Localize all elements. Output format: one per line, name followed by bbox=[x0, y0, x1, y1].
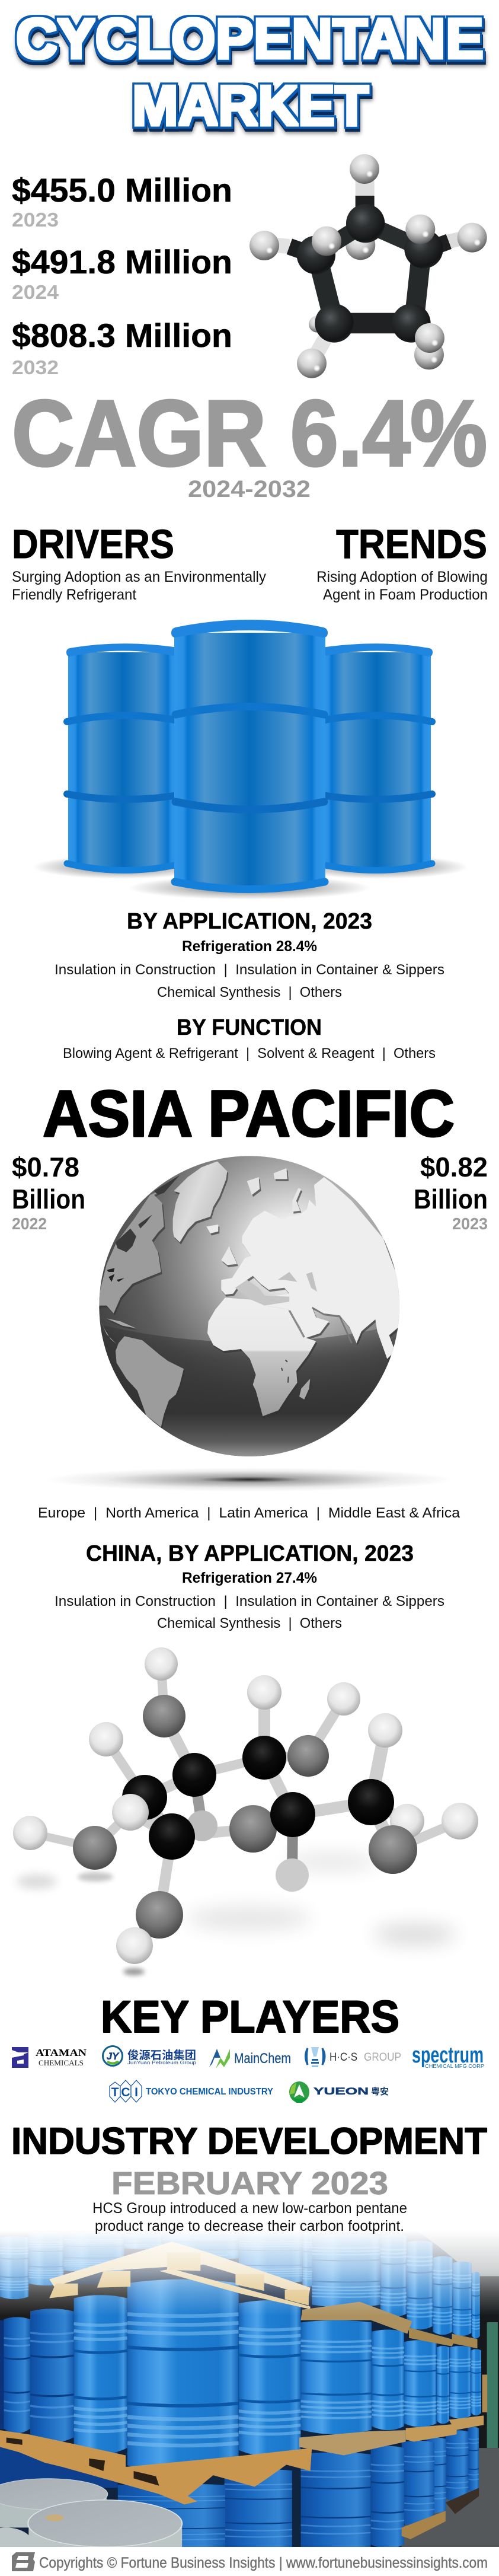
stat: 2022 value: Billion bbox=[12, 1184, 85, 1214]
heading: by application: BY APPLICATION, 2023 bbox=[127, 909, 372, 934]
white top fade bbox=[0, 2224, 499, 2316]
segment list: Insulation in Construction | Insulation in Container & Sippers bbox=[55, 1593, 444, 1609]
drivers text: Surging Adoption as an Environmentally bbox=[12, 569, 266, 585]
development date: FEBRUARY 2023 bbox=[111, 2166, 388, 2201]
logo: Yueon bbox=[289, 2081, 389, 2103]
logo: JunYuan Petroleum: 俊源石油集团 bbox=[127, 2046, 196, 2062]
top segment: Refrigeration 27.4% bbox=[182, 1570, 317, 1586]
logo: HCS Group: H·C·S bbox=[330, 2051, 357, 2064]
drivers text: Friendly Refrigerant bbox=[12, 586, 136, 603]
grey drums bbox=[0, 2478, 183, 2547]
segment list bbox=[55, 1593, 444, 1631]
heading: by function: BY FUNCTION bbox=[177, 1015, 322, 1040]
upper drums bbox=[0, 2232, 480, 2339]
panel: by function bbox=[63, 1015, 436, 1061]
development text: product range to decrease their carbon footprint. bbox=[95, 2218, 404, 2234]
south america bbox=[116, 1336, 184, 1427]
stat: 2023 value: $0.82 bbox=[420, 1152, 488, 1182]
title: CYCLOPENTANE bbox=[16, 7, 484, 71]
left barrel bbox=[66, 643, 178, 871]
function list: Blowing Agent & Refrigerant | Solvent & Reagent | Others bbox=[63, 1045, 436, 1061]
heading: Asia Pacific: ASIA PACIFIC bbox=[43, 1077, 455, 1150]
stat: 2022 value: $0.78 bbox=[12, 1152, 79, 1182]
eurasia bbox=[221, 1177, 403, 1359]
logo: HCS Group: GROUP bbox=[364, 2051, 401, 2064]
north america bbox=[95, 1189, 164, 1318]
panel: trends bbox=[316, 521, 488, 603]
top segment: Refrigeration 28.4% bbox=[182, 938, 317, 955]
title: MARKET bbox=[132, 74, 369, 138]
segment list: Chemical Synthesis | Others bbox=[157, 984, 342, 1000]
logo: Ataman Chemicals: ATAMAN bbox=[36, 2047, 87, 2058]
heading: key players: KEY PLAYERS bbox=[101, 1992, 399, 2042]
inland seas bbox=[235, 1280, 289, 1306]
heading: China: CHINA, BY APPLICATION, 2023 bbox=[86, 1541, 414, 1566]
panel: China by application bbox=[55, 1541, 444, 1631]
logo: Yueon: 粤安 bbox=[371, 2085, 389, 2097]
logo: HCS Group bbox=[306, 2047, 401, 2067]
warehouse backdrop bbox=[0, 2224, 499, 2550]
icon: cyclopentane molecule bbox=[250, 154, 487, 378]
panel: by application bbox=[55, 909, 444, 1000]
logo: Tokyo Chemical Industry: C bbox=[121, 2086, 130, 2099]
segment list bbox=[55, 962, 444, 1000]
segment list: Chemical Synthesis | Others bbox=[157, 1615, 342, 1631]
logo: Ataman Chemicals bbox=[12, 2047, 87, 2068]
middle drums bbox=[0, 2279, 481, 2473]
development text bbox=[92, 2200, 407, 2234]
logo: JunYuan Petroleum: JY bbox=[107, 2051, 120, 2062]
logo: Yueon: YUEON bbox=[314, 2086, 369, 2097]
trends text bbox=[316, 569, 488, 603]
icon: oil barrels bbox=[33, 620, 468, 900]
value 2024: $491.8 Million bbox=[12, 243, 232, 280]
logo: Tokyo Chemical Industry: T bbox=[111, 2086, 119, 2099]
title bbox=[16, 7, 484, 138]
heading: industry development: INDUSTRY DEVELOPMENT bbox=[11, 2121, 487, 2162]
hudson bay and lakes bbox=[116, 1175, 180, 1252]
africa bbox=[207, 1297, 316, 1416]
logo: Tokyo Chemical Industry: I bbox=[135, 2086, 138, 2099]
icon: Fortune Business Insights logo bbox=[12, 2552, 35, 2571]
year 2023: 2023 bbox=[12, 209, 59, 231]
stat: 2023 value: 2023 bbox=[452, 1214, 488, 1233]
CAGR period: 2024-2032 bbox=[188, 476, 311, 502]
logo: Ataman Chemicals: CHEMICALS bbox=[39, 2058, 84, 2067]
stat: 2022 value: 2022 bbox=[12, 1214, 47, 1233]
year 2032: 2032 bbox=[12, 356, 59, 378]
stat: 2023 value bbox=[414, 1152, 488, 1233]
value 2032: $808.3 Million bbox=[12, 317, 232, 354]
greenland bbox=[173, 1161, 227, 1242]
trends text: Rising Adoption of Blowing bbox=[316, 569, 488, 585]
footer bbox=[12, 2552, 488, 2571]
icon: globe bbox=[95, 1156, 403, 1462]
segment list: Insulation in Construction | Insulation in Container & Sippers bbox=[55, 962, 444, 978]
logo: JunYuan Petroleum: JunYuan Petroleum Group bbox=[127, 2060, 197, 2065]
other regions list: Europe | North America | Latin America | Middle East & Africa bbox=[38, 1505, 460, 1521]
pallets bbox=[0, 2242, 484, 2539]
trends text: Agent in Foam Production bbox=[323, 586, 488, 603]
logo: MainChem bbox=[209, 2049, 291, 2068]
drivers text bbox=[12, 569, 266, 603]
development text: HCS Group introduced a new low-carbon pentane bbox=[92, 2200, 407, 2217]
logo: Tokyo Chemical Industry bbox=[110, 2080, 273, 2102]
year 2024: 2024 bbox=[12, 281, 59, 303]
logo: MainChem: MainChem bbox=[234, 2051, 291, 2067]
photo: stacked blue drums on pallets bbox=[0, 2224, 499, 2561]
logo: Tokyo Chemical Industry: TOKYO CHEMICAL INDUSTRY bbox=[146, 2087, 273, 2097]
globe shadow bbox=[45, 1468, 454, 1491]
stat: 2022 value bbox=[12, 1152, 85, 1233]
stat: 2023 value: Billion bbox=[414, 1184, 488, 1214]
heading: drivers: DRIVERS bbox=[12, 521, 174, 567]
logo: Spectrum Chemical: CHEMICAL MFG CORP bbox=[425, 2064, 484, 2069]
panel: drivers bbox=[12, 521, 266, 603]
center barrel bbox=[171, 620, 328, 890]
market size stats bbox=[12, 171, 232, 378]
value 2023: $455.0 Million bbox=[12, 171, 232, 209]
right barrel bbox=[322, 643, 433, 871]
logo: JunYuan Petroleum bbox=[103, 2046, 197, 2066]
icon: ball and stick molecule bbox=[13, 1647, 478, 1975]
lower drums bbox=[0, 2427, 479, 2553]
